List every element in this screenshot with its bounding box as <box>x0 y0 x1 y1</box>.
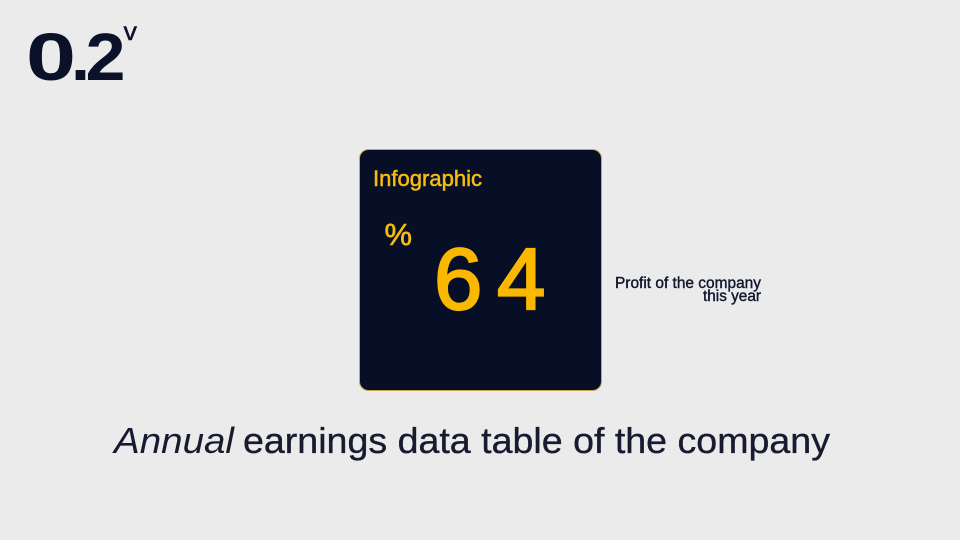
percent sign: % <box>384 217 412 252</box>
card heading: Infographic <box>373 166 482 191</box>
big number: 64 <box>434 231 545 328</box>
logo: 0.2v: . <box>71 20 90 95</box>
logo: 0.2v: v <box>124 18 138 46</box>
logo: 0.2v <box>26 18 138 95</box>
caption: Annual <box>112 420 235 461</box>
profit description <box>615 275 761 305</box>
logo: 0.2v: 2 <box>86 20 126 95</box>
logo: 0.2v: 0 <box>26 20 76 95</box>
caption: earnings data table of the company <box>243 420 830 461</box>
profit description: Profit of the company <box>615 275 761 292</box>
profit description: this year <box>703 288 761 305</box>
panel: profit card <box>360 150 602 390</box>
